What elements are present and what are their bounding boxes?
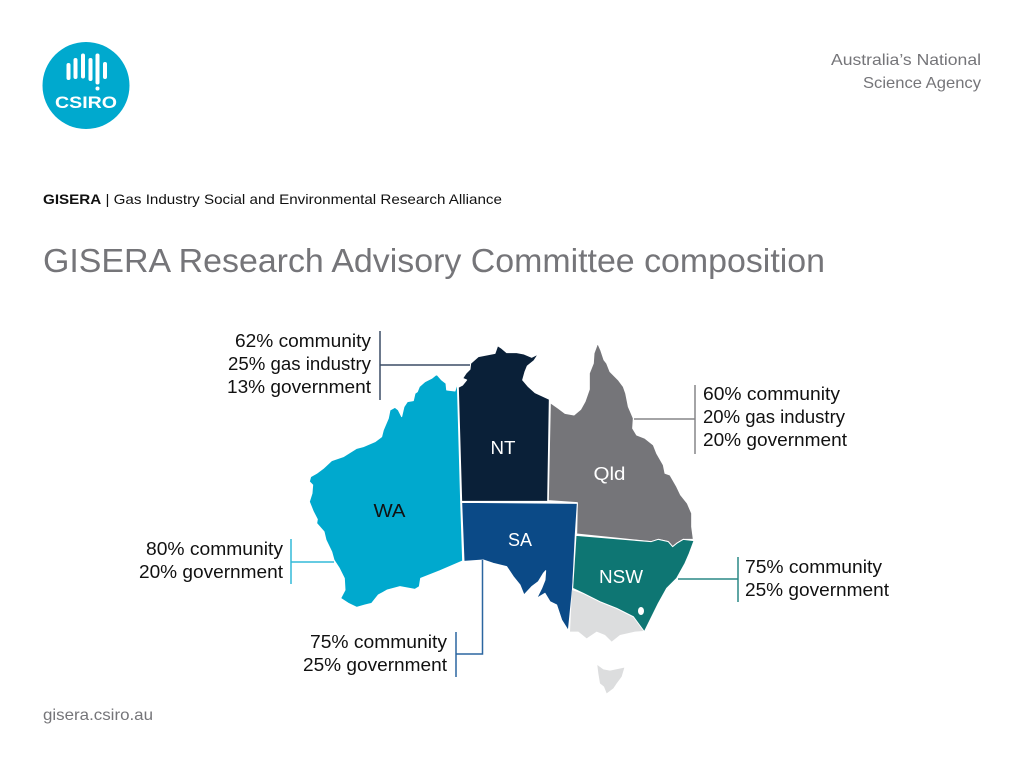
callout: NSW [678,557,889,602]
tagline [831,52,981,92]
state: South Australia [462,502,577,631]
callout: NT [227,331,470,400]
map of Australia [309,343,694,693]
state: New South Wales [573,535,694,632]
callout: SA: 25% government [303,655,447,675]
state: Northern Territory [458,346,549,501]
website URL: gisera.csiro.au [43,707,153,724]
callout: NT: 13% government [227,377,371,397]
state: Queensland [548,343,693,547]
callout: WA: 20% government [139,562,283,582]
tagline: Australia’s National [831,52,981,69]
callout: Qld: 20% gas industry [703,407,845,427]
callout: WA [139,539,334,584]
state: Queensland: Qld [594,464,626,484]
callout: NT: 25% gas industry [228,354,371,374]
callout: SA: 75% community [310,632,447,652]
callout: NT: 62% community [235,331,371,351]
callout: NSW: 75% community [745,557,882,577]
callout: Qld [634,384,847,454]
subtitle: GISERA | Gas Industry Social and Environmental Research Alliance [43,191,502,207]
callout: SA [303,560,482,677]
state: Victoria [570,590,643,642]
callout: Qld: 60% community [703,384,840,404]
state: Tasmania [597,665,624,693]
icon: CSIRO logo: CSIRO [55,94,117,112]
tagline: Science Agency [863,75,981,92]
state: New South Wales: NSW [599,567,643,587]
state: Western Australia: WA [374,501,406,521]
callout: NSW: 25% government [745,580,889,600]
callout: Qld: 20% government [703,430,847,450]
title: GISERA Research Advisory Committee composition [43,242,825,279]
state: Western Australia [309,374,463,607]
state: South Australia: SA [508,530,532,550]
callout: WA: 80% community [146,539,283,559]
state: Northern Territory: NT [490,438,516,458]
icon: CSIRO logo [42,42,130,129]
